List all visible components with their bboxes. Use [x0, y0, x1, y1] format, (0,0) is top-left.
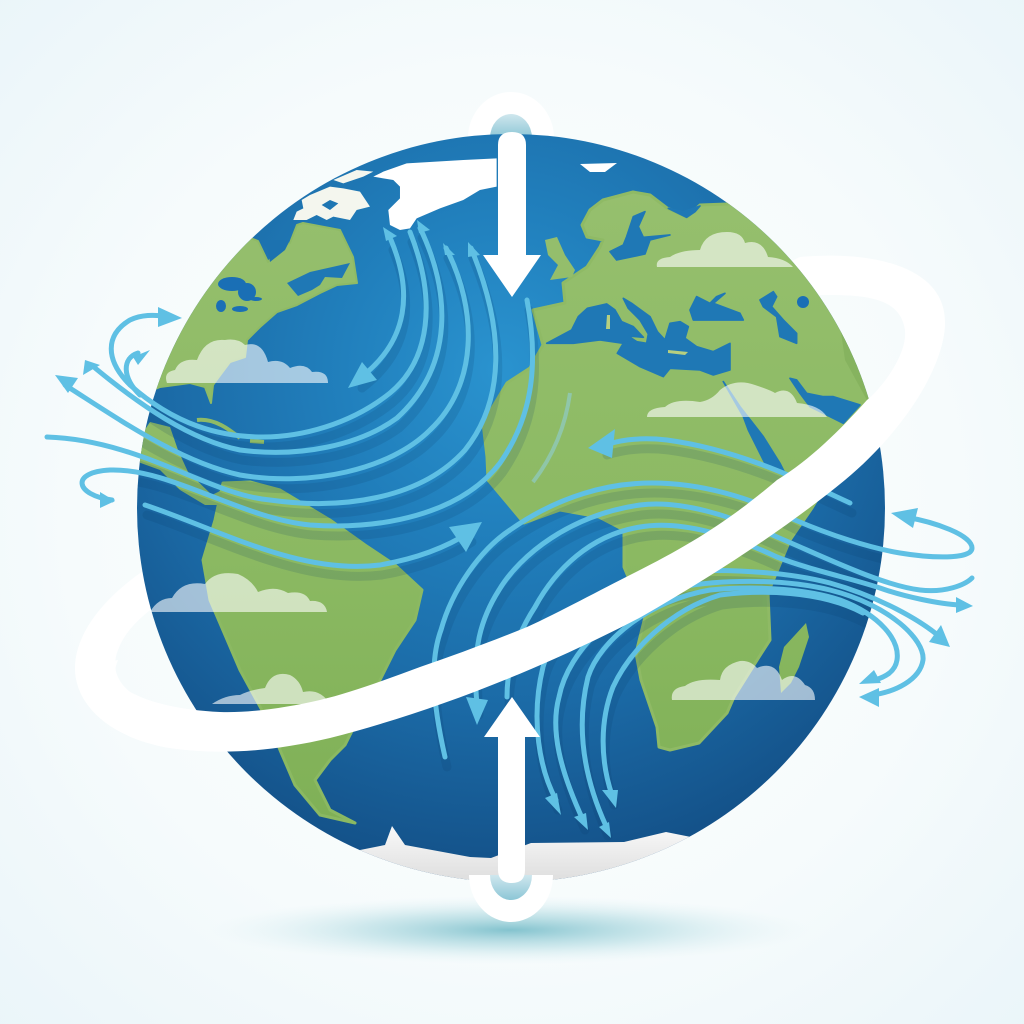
arrow: top pole pointing down	[483, 132, 541, 297]
sea: White Sea	[668, 206, 700, 217]
clouds	[150, 232, 827, 704]
sea: Black Sea	[690, 293, 743, 320]
seas of Europe and the Middle East	[547, 206, 860, 477]
cloud: Europe	[657, 232, 793, 267]
lakes: Great Lakes	[216, 277, 262, 312]
bottom pole mount	[469, 875, 553, 922]
sea: Baltic	[610, 212, 670, 260]
white ring: front portion over globe	[75, 322, 945, 752]
cloud: South America lower	[212, 674, 330, 704]
sea: Gulf of St Lawrence	[287, 263, 350, 296]
arrow: bottom pole pointing up	[484, 697, 540, 883]
ice: Arctic islands	[293, 170, 373, 220]
land: British Isles	[545, 237, 575, 280]
sea: Eastern Mediterranean	[617, 322, 730, 377]
cloud: Atlantic west	[166, 340, 328, 383]
sea: Adriatic	[623, 298, 657, 334]
land: darker eastern shading	[841, 332, 869, 400]
circulation streams	[47, 220, 973, 838]
ice: Antarctica	[360, 826, 690, 880]
globe	[130, 134, 900, 900]
ice: Svalbard	[580, 163, 617, 172]
cloud: Southern Africa	[672, 661, 815, 700]
land: Mediterranean islands	[606, 315, 688, 355]
ice: Greenland	[293, 158, 497, 230]
sea: Hudson Bay inlet	[270, 240, 290, 262]
sea: Aral	[797, 296, 809, 308]
ground shadow	[210, 896, 810, 964]
sea: Red Sea	[723, 382, 787, 477]
landmasses	[130, 158, 900, 900]
land: Eurasia and Africa	[483, 192, 900, 750]
land: Caribbean islands	[197, 420, 264, 442]
top pole mount	[468, 92, 554, 138]
sea: Caspian	[760, 292, 797, 343]
land: Central America	[138, 422, 222, 505]
land: Madagascar	[779, 623, 809, 693]
white ring: back portion behind globe	[75, 256, 945, 752]
sea: Western Mediterranean	[547, 304, 643, 343]
arrowheads	[55, 220, 973, 838]
sea: Persian Gulf	[790, 378, 860, 423]
cloud: South America	[150, 573, 327, 612]
stream shadows	[138, 234, 882, 756]
cloud: North Africa	[647, 382, 827, 417]
land: North America	[156, 222, 358, 404]
land: South America	[203, 482, 422, 823]
stream: faint vertical streak	[533, 393, 570, 482]
